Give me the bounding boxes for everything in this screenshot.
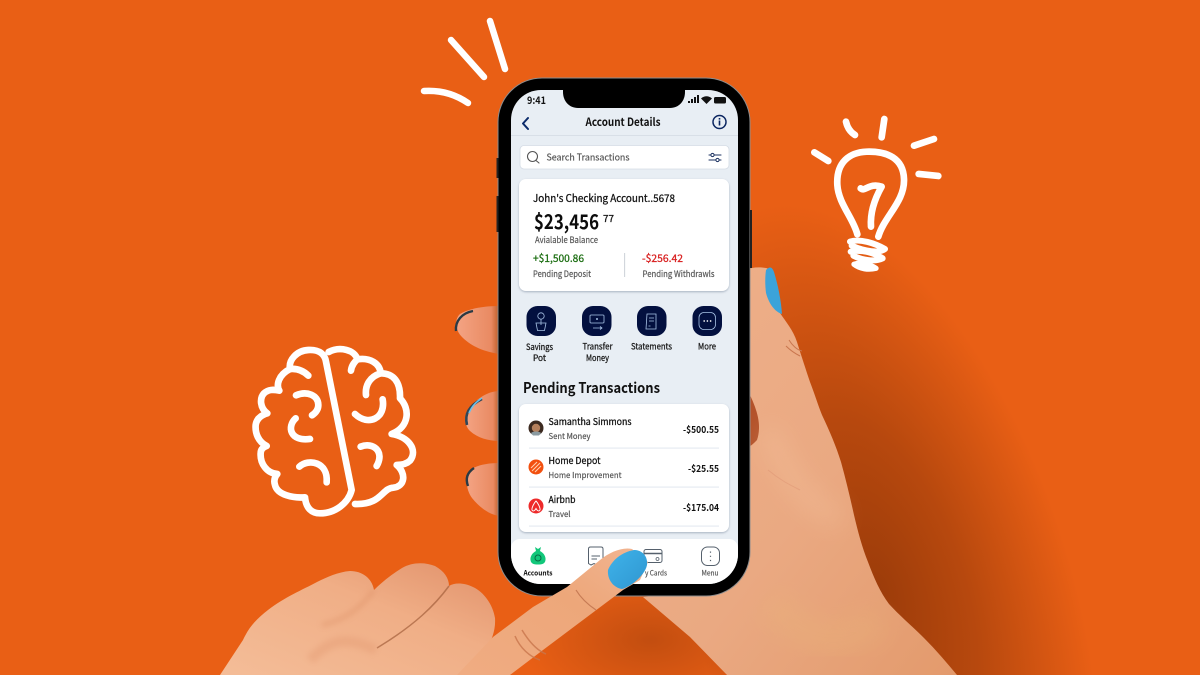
nav: menu: Menu	[702, 568, 718, 578]
finger: middle	[465, 391, 500, 441]
action: transfer money: Money	[586, 352, 609, 364]
row: Samantha Simmons: Samantha Simmons	[548, 414, 632, 428]
hand: right hand holding phone	[643, 267, 957, 675]
action: savings pot: Pot	[533, 352, 547, 364]
icon: brain outline	[256, 349, 413, 513]
phone body	[498, 78, 750, 596]
row: Airbnb	[528, 495, 719, 518]
app screen	[511, 88, 738, 589]
scene: phone banking app on orange background	[220, 18, 1072, 675]
account balance card: 77	[603, 211, 614, 225]
account balance card: Pending Deposit	[533, 268, 592, 280]
notch	[563, 88, 685, 108]
row: Samantha Simmons	[528, 417, 718, 442]
transactions list card	[519, 404, 729, 532]
action: more	[692, 306, 722, 352]
action: savings pot: Savings	[526, 341, 553, 353]
row: Airbnb: Travel	[548, 509, 570, 520]
action: savings pot	[526, 306, 556, 364]
row: Samantha Simmons: Sent Money	[548, 431, 591, 442]
nav: accounts: Accounts	[523, 568, 553, 578]
action: transfer money	[582, 306, 613, 364]
account balance card: $23,456	[534, 206, 599, 235]
search bar: Search Transactions	[546, 150, 630, 164]
bottom navigation	[511, 539, 738, 589]
row: Home Depot: -$25.55	[688, 461, 719, 475]
row: Home Depot	[528, 456, 718, 480]
phone	[496, 78, 752, 596]
row: Home Depot: Home Depot	[548, 453, 601, 467]
account balance card: -$256.42	[642, 251, 683, 266]
header: Account Details	[585, 114, 661, 130]
nav: statements icon	[588, 547, 603, 565]
icon: attention sparks above phone	[424, 21, 505, 103]
status bar	[527, 95, 726, 104]
heading: pending transactions: Pending Transactions	[523, 377, 660, 398]
nav: cards: y Cards	[645, 568, 668, 578]
finger: lower	[467, 463, 500, 516]
row: Airbnb: Airbnb	[548, 492, 576, 506]
action: statements: Statements	[631, 340, 672, 352]
header	[511, 114, 738, 136]
hand: fingers behind phone	[456, 306, 500, 516]
status bar: 9:41	[527, 92, 546, 107]
hand: index finger tapping screen	[457, 549, 648, 675]
row: Home Depot: Home Improvement	[548, 470, 622, 481]
account balance card	[519, 179, 729, 291]
search bar	[520, 146, 729, 169]
finger: upper	[456, 306, 500, 354]
icon: fingernail	[608, 550, 647, 589]
row: Samantha Simmons: -$500.55	[683, 422, 719, 436]
account balance card: Avialable Balance	[535, 234, 598, 246]
account balance card: +$1,500.86	[533, 251, 584, 266]
quick actions	[526, 306, 722, 364]
nav: accounts	[524, 547, 552, 576]
icon: hand-drawn light bulb	[814, 119, 938, 269]
action: statements	[631, 306, 672, 352]
icon: thumb nail	[765, 268, 782, 314]
account balance card: Pending Withdrawls	[642, 268, 715, 280]
nav: cards	[644, 550, 668, 578]
nav: menu	[702, 547, 720, 578]
account balance card: John's Checking Account..5678	[533, 191, 675, 206]
action: transfer money: Transfer	[582, 340, 613, 352]
row: Airbnb: -$175.04	[683, 500, 719, 514]
hand: left hand fingers	[220, 563, 495, 675]
action: more: More	[698, 340, 716, 352]
